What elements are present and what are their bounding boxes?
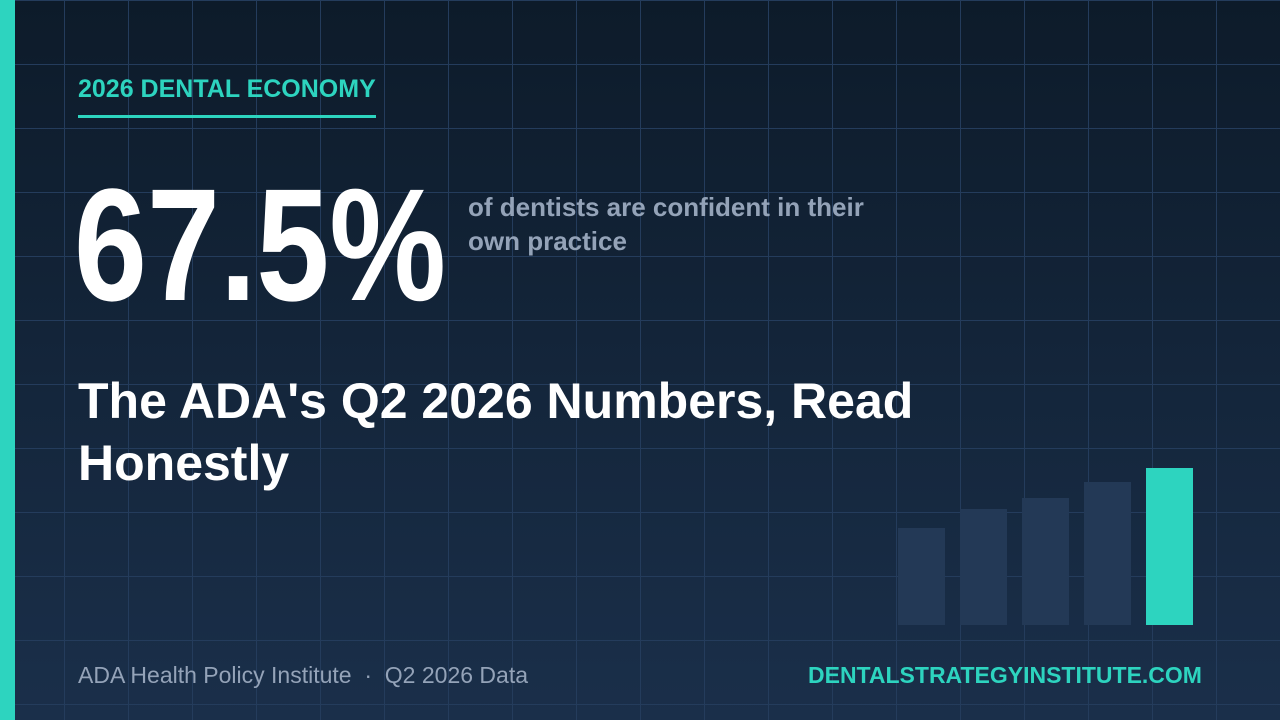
website footer: DENTALSTRATEGYINSTITUTE.COM [808,662,1202,688]
big statistic: 67.5% [74,155,446,334]
statistic description: own practice [468,226,627,256]
bar chart [898,468,1193,625]
main title: The ADA's Q2 2026 Numbers, Read [78,373,913,429]
main title [78,373,913,491]
bar 2 [960,509,1007,625]
bar 1 [898,528,945,625]
source footer: ADA Health Policy Institute · Q2 2026 Data [78,662,528,688]
statistic description [468,192,864,256]
bar 3 [1022,498,1069,625]
bar 4 [1084,482,1131,625]
statistic description: of dentists are confident in their [468,192,864,222]
eyebrow heading: 2026 DENTAL ECONOMY [78,75,376,103]
accent bar [0,0,15,720]
main title: Honestly [78,435,289,491]
bar 5 highlighted [1146,468,1193,625]
eyebrow underline [78,115,376,118]
